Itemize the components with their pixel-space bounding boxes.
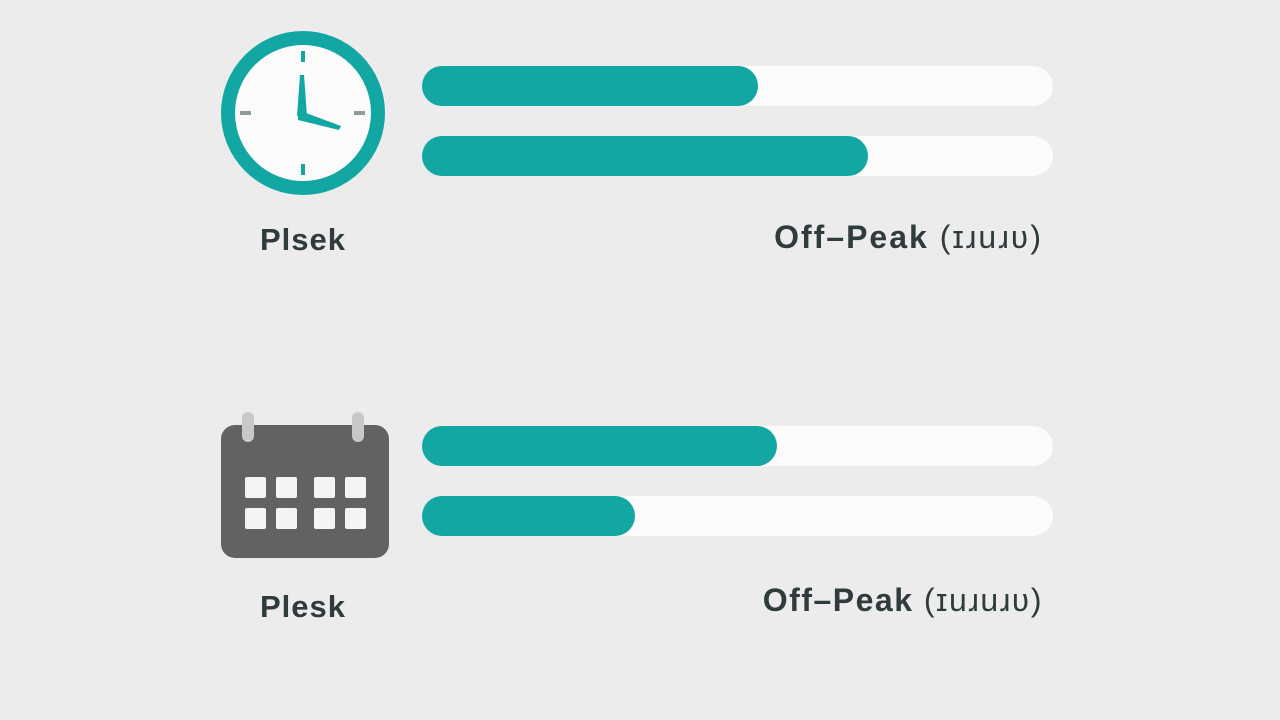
label: bottom peak: Plesk — [260, 589, 346, 624]
label: top off-peak: Off–Peak (ɪɹuɹʋ) — [774, 219, 1043, 255]
icon: clock — [228, 38, 378, 188]
bar fill 1 — [422, 66, 758, 106]
bar track 3 — [422, 426, 1053, 466]
label: top peak: Plsek — [260, 222, 346, 257]
bar track 1 — [422, 66, 1053, 106]
bar track 4 — [422, 496, 1053, 536]
bar fill 2 — [422, 136, 868, 176]
bar track 2 — [422, 136, 1053, 176]
bar fill 4 — [422, 496, 635, 536]
icon: calendar — [221, 412, 389, 558]
label: bottom off-peak: Off–Peak (ɪuɹuɹʋ) — [763, 582, 1043, 618]
bar fill 3 — [422, 426, 777, 466]
